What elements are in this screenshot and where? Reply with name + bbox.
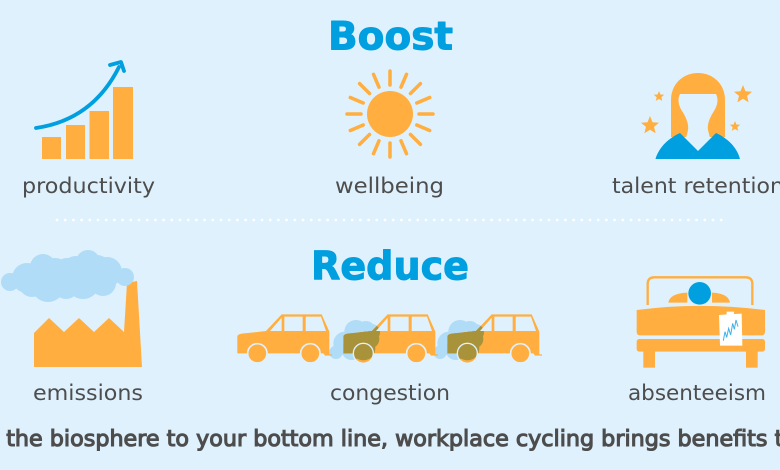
car 2 wheel ring and windows xyxy=(353,317,432,363)
car 3 smoke overlap xyxy=(447,326,484,360)
car 2 smoke overlap xyxy=(343,326,380,360)
icon: person with stars xyxy=(641,73,752,159)
exhaust cloud between first and second car xyxy=(329,320,380,360)
icon: sun xyxy=(347,71,433,157)
car 3 wheel ring and windows xyxy=(457,317,536,363)
icon: person in bed with clipboard xyxy=(637,277,765,368)
car 1 xyxy=(237,314,332,363)
label: wellbeing: wellbeing xyxy=(335,174,444,199)
exhaust cloud between second and third car xyxy=(433,320,484,360)
heading: Reduce: Reduce xyxy=(311,244,469,290)
icon: congested cars with exhaust xyxy=(237,314,542,363)
car 2 xyxy=(343,314,438,363)
label: absenteeism: absenteeism xyxy=(628,381,766,406)
label: talent retention: talent retention xyxy=(612,174,780,199)
label: congestion: congestion xyxy=(330,381,450,406)
car 3 xyxy=(447,314,542,363)
icon: productivity bar chart with arrow xyxy=(36,62,133,159)
heading: Boost: Boost xyxy=(328,14,453,60)
label: emissions: emissions xyxy=(33,381,143,406)
icon: factory with cloud xyxy=(1,250,142,367)
label: productivity: productivity xyxy=(22,174,155,199)
